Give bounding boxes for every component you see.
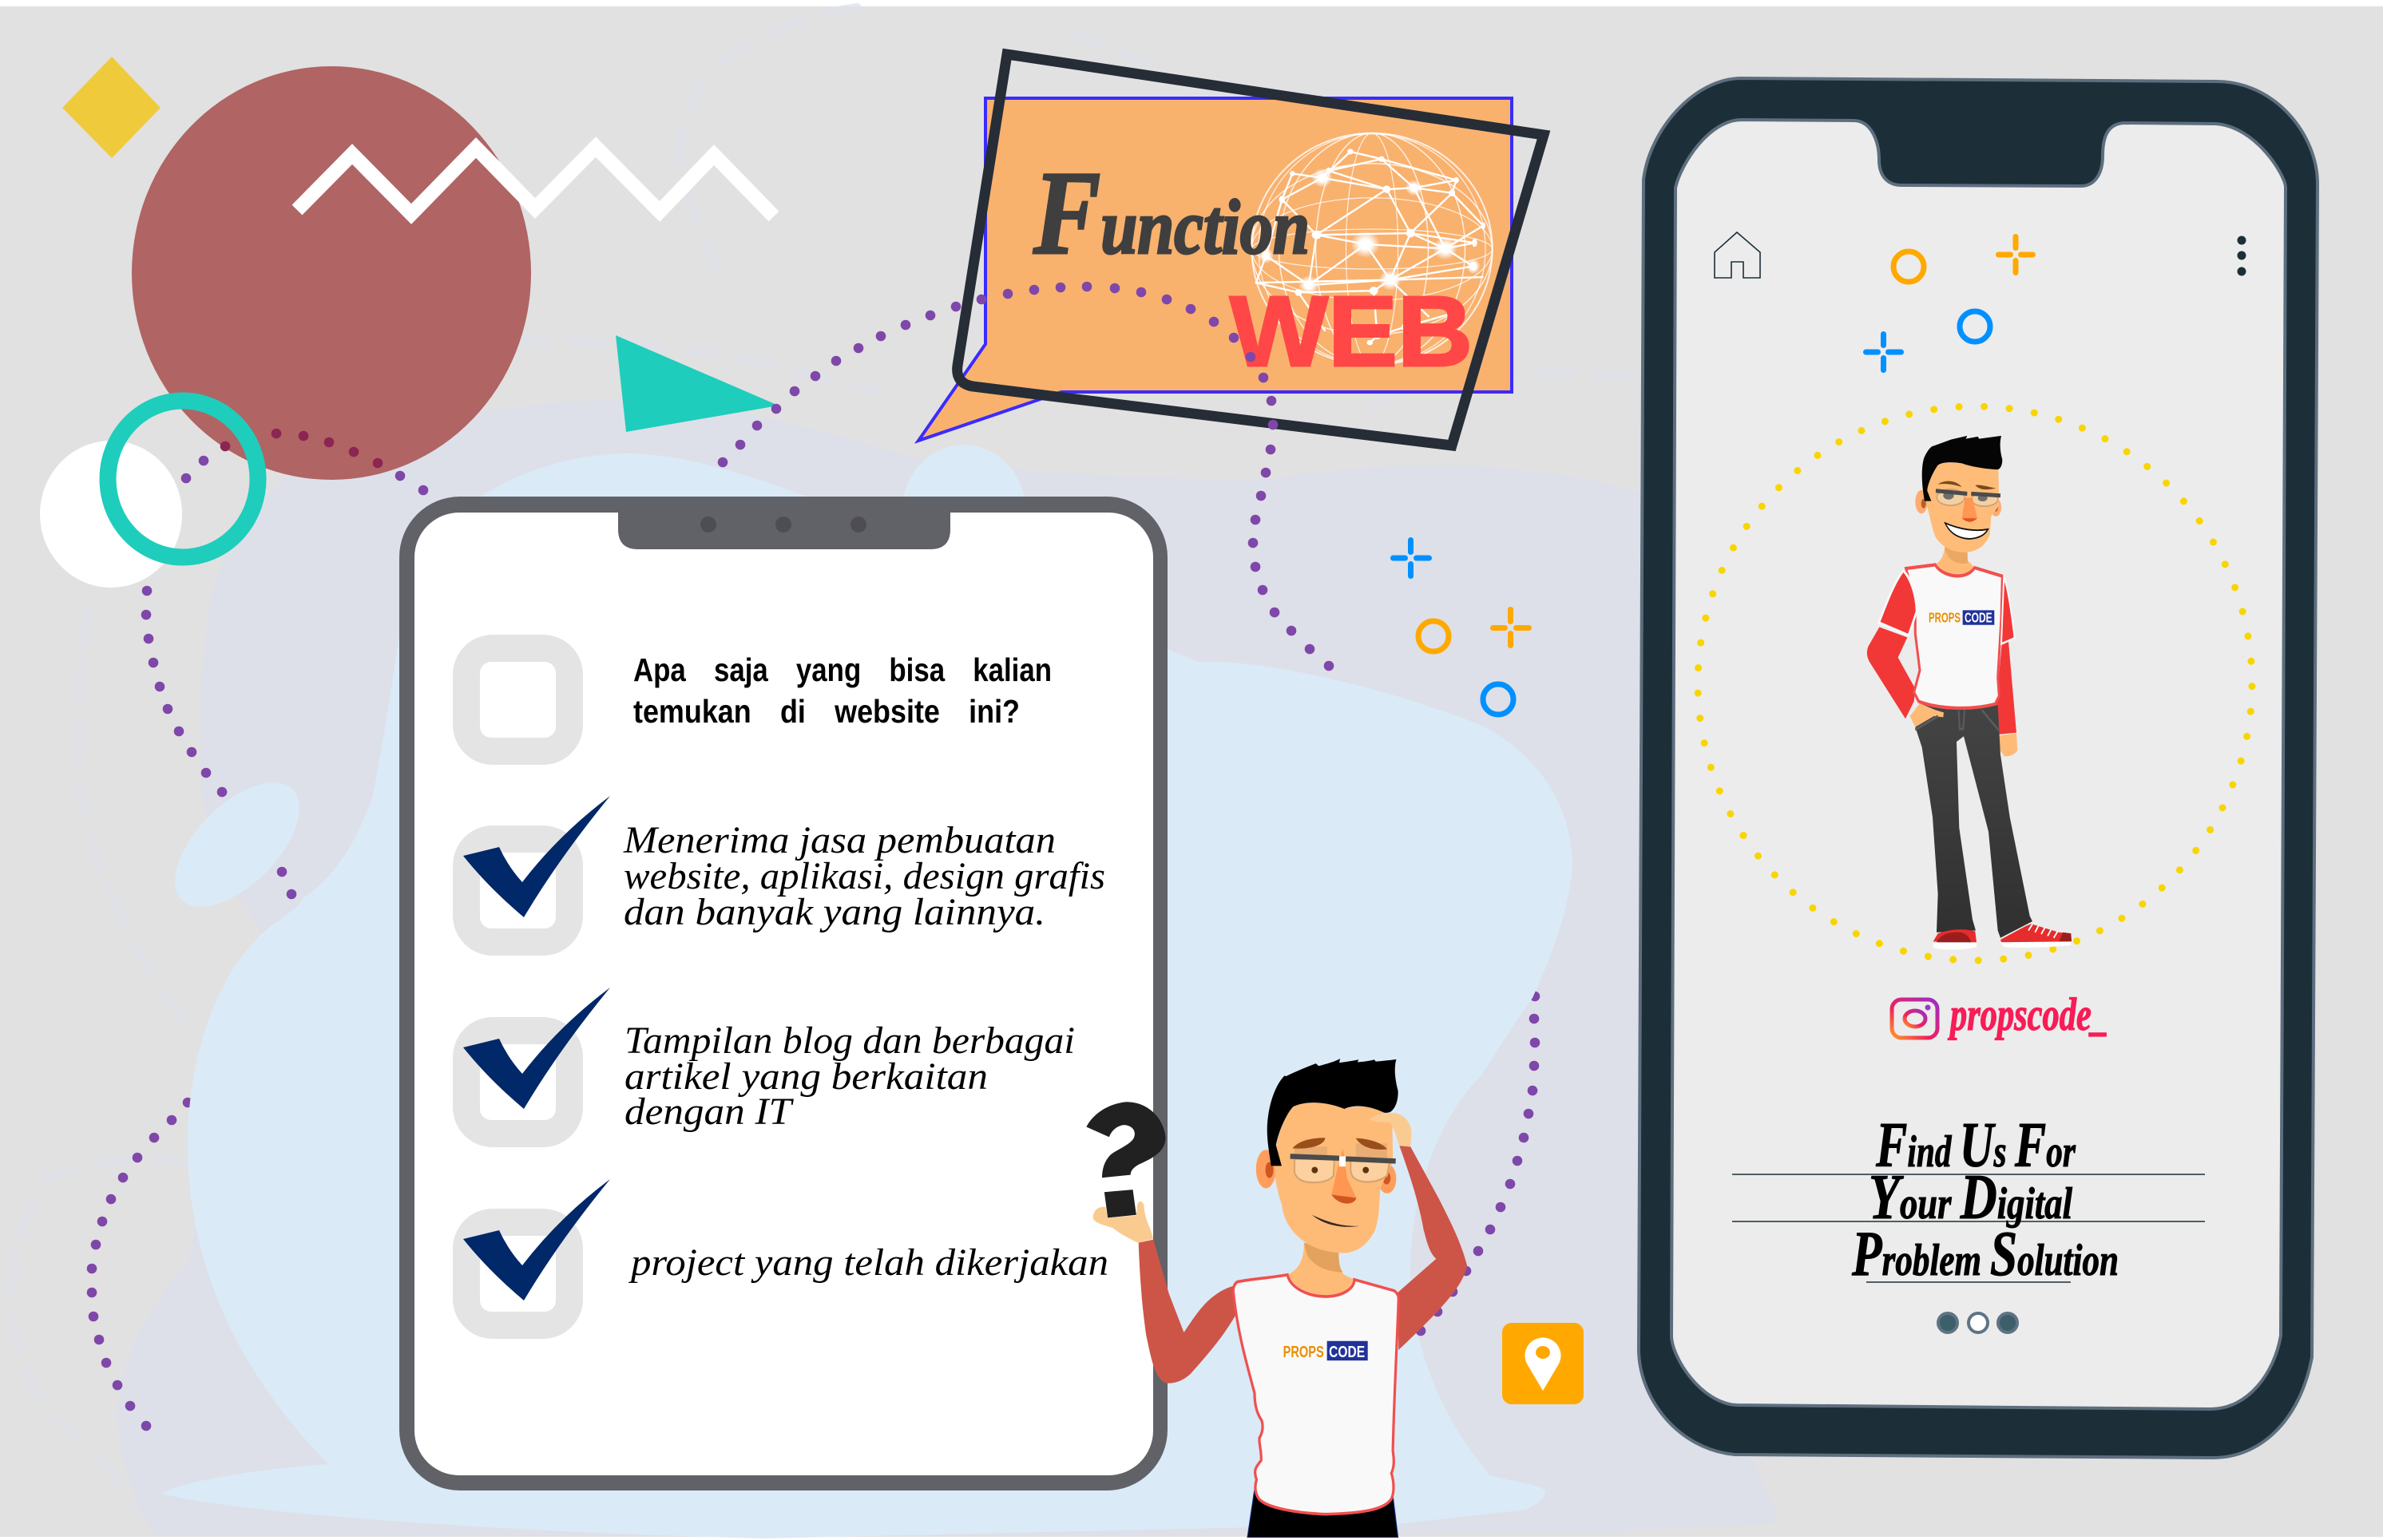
orange cross [1490, 607, 1532, 648]
hand on head [1370, 1113, 1411, 1146]
icon: location pin tile [1502, 1323, 1584, 1404]
right hand [1999, 734, 2017, 757]
shirt [1906, 564, 2002, 708]
tilted dark frame [958, 54, 1544, 445]
phone body [399, 497, 1168, 1491]
ears [1256, 1150, 1396, 1194]
blue cross [1863, 331, 1904, 373]
pants [1247, 1479, 1398, 1538]
checklist question: Apa saja yang bisa kalian [633, 651, 1052, 688]
left arm sleeve [1139, 1240, 1236, 1384]
checklist question [633, 651, 1052, 730]
tagline text: Problem Solution [1851, 1219, 2119, 1289]
orange ring [1418, 621, 1449, 651]
heading: Function: Function [1033, 147, 1310, 279]
phone notch [618, 503, 950, 549]
neck [1287, 1243, 1354, 1296]
hair [1267, 1059, 1398, 1166]
shirt logo [1283, 1341, 1368, 1361]
eyes [1311, 1167, 1369, 1174]
speech bubble: Function Web [918, 54, 1544, 445]
left shoe [1933, 929, 1977, 950]
item 2 text: dengan IT [624, 1091, 795, 1133]
tagline text [1851, 1110, 2119, 1289]
checklist question: temukan di website ini? [633, 693, 1020, 730]
nose [1331, 1148, 1356, 1204]
neck shadow [1304, 1243, 1343, 1273]
right sleeve [2001, 577, 2015, 644]
empty checkbox [453, 635, 583, 765]
eyebrows [1292, 1138, 1387, 1150]
background blob: grey-blue [117, 399, 1781, 1537]
decorative: yellow diamond [62, 57, 161, 158]
face [1926, 462, 1999, 552]
pants [1915, 703, 2032, 938]
yellow dotted circle [1695, 403, 2255, 964]
item 3 text: project yang telah dikerjakan [628, 1241, 1108, 1284]
background blob: light blue [161, 453, 1572, 1538]
item 1 text: dan banyak yang lainnya. [624, 891, 1045, 933]
orange cross [1996, 234, 2036, 275]
tagline text: Your Digital [1869, 1162, 2072, 1233]
neck shadow [1945, 548, 1968, 564]
glasses [1291, 1156, 1396, 1182]
right shoe [2000, 924, 2072, 948]
tagline text: Find Us For [1875, 1110, 2076, 1181]
right arm sleeve [1398, 1146, 1467, 1350]
icon: network globe [1251, 133, 1493, 365]
icons outside phone: sparkles [1390, 537, 1532, 715]
blue ring [1483, 684, 1513, 715]
shirt logo: PROPS [1283, 1344, 1324, 1361]
eyebrow shadows [1295, 1143, 1387, 1158]
bubble shape [918, 98, 1512, 441]
checked item 2 [453, 988, 610, 1147]
item 1 text: website, aplikasi, design grafis [624, 855, 1105, 897]
left sleeve [1879, 571, 1917, 635]
item 2 text: artikel yang berkaitan [624, 1055, 988, 1098]
character: smiling man [1867, 436, 2072, 950]
background blob: top bump [902, 445, 1026, 580]
phone body [1639, 78, 2318, 1458]
hair [1922, 436, 2002, 501]
right phone [1639, 78, 2318, 1458]
pocket lines [1915, 710, 1999, 730]
decorative: white zigzag [297, 147, 774, 216]
eyebrows [1938, 481, 1996, 489]
purple dotted path [87, 282, 1540, 1431]
icon: question mark [1086, 1102, 1166, 1217]
decorative: teal triangle [616, 335, 779, 432]
notch cameras [700, 517, 866, 532]
glasses [1936, 489, 2000, 506]
blue cross [1390, 537, 1432, 579]
phone screen [1671, 120, 2286, 1409]
shirt logo: CODE [1965, 611, 1992, 626]
item 1 text: Menerima jasa pembuatan [623, 819, 1056, 861]
face [1275, 1103, 1393, 1253]
mouth [1312, 1215, 1359, 1227]
shirt logo [1929, 610, 1994, 626]
character: confused man with question mark [1086, 1059, 1467, 1538]
phone screen [414, 513, 1153, 1475]
right forearm [1996, 641, 2016, 734]
blue ring [1960, 311, 1990, 342]
item 1 text [623, 819, 1105, 933]
item 2 text [624, 1019, 1075, 1133]
decorative: white circle [40, 441, 182, 588]
background: faint dashed outlines [10, 8, 1629, 1508]
orange ring [1893, 251, 1924, 282]
nose [1962, 498, 1977, 522]
ears [1915, 490, 2001, 517]
hand in pocket [1910, 703, 1944, 727]
background blob: tilted oval [153, 761, 321, 928]
heading: WEB: WEB [1230, 276, 1473, 387]
decorative: teal ring [108, 401, 258, 557]
shirt [1233, 1275, 1398, 1514]
instagram handle: propscode_ [1947, 988, 2108, 1040]
item 2 text: Tampilan blog dan berbagai [624, 1019, 1075, 1062]
icon: home [1715, 232, 1760, 278]
shirt logo: CODE [1329, 1344, 1365, 1361]
pagination dots [1938, 1313, 2017, 1332]
checked item 3 [453, 1179, 610, 1339]
icon: instagram [1892, 1000, 1937, 1038]
dots partly hidden behind blue blob [183, 661, 1540, 1107]
smile [1945, 523, 1988, 539]
decorative: large rust circle [132, 66, 531, 480]
checked item 1 [453, 796, 610, 956]
hand holding [1093, 1202, 1153, 1243]
divider lines [1732, 1174, 2205, 1282]
menu dots [2238, 236, 2246, 276]
left arm sleeve [1867, 627, 1915, 719]
left phone checklist panel [399, 497, 1168, 1491]
neck [1935, 546, 1975, 576]
shirt logo: PROPS [1929, 611, 1961, 626]
